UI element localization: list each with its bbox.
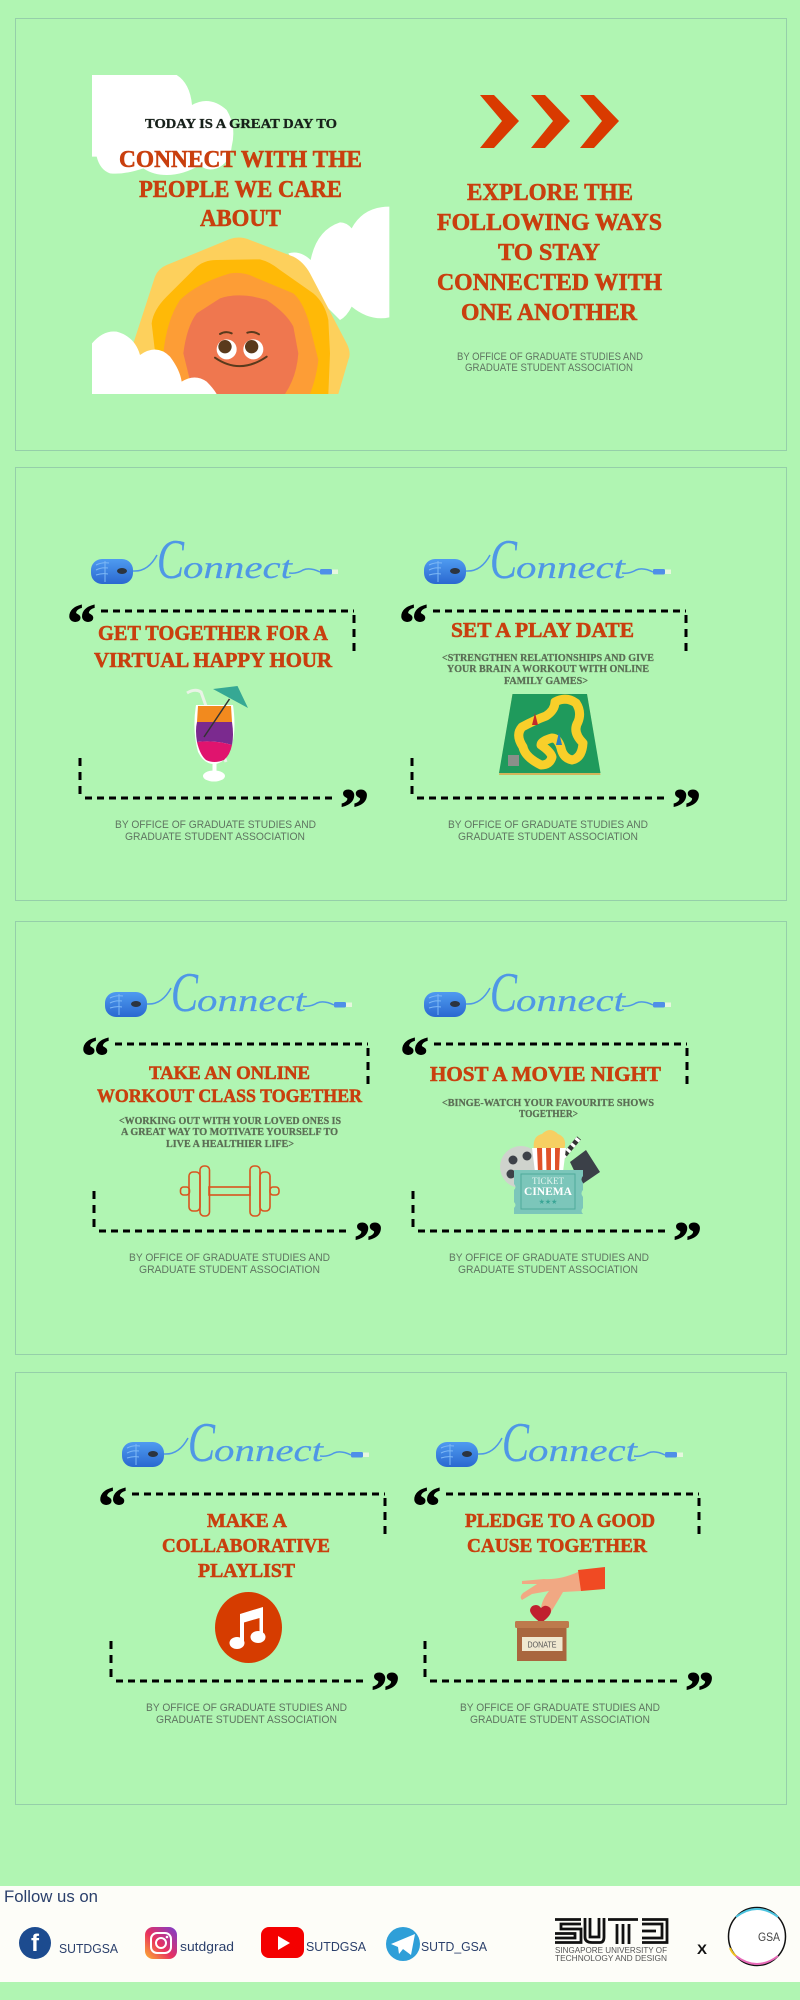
byline xyxy=(146,1702,347,1726)
byline: BY OFFICE OF GRADUATE STUDIES AND xyxy=(457,351,643,363)
social: instagram xyxy=(145,1927,234,1959)
connect mouse logo: onnect xyxy=(516,982,626,1018)
connect mouse logo: C xyxy=(188,1412,215,1474)
heading: virtual happy hour: VIRTUAL HAPPY HOUR xyxy=(94,648,333,672)
connect mouse logo xyxy=(424,529,671,591)
heading: today is a great day: ABOUT xyxy=(200,206,281,232)
icon: cocktail xyxy=(187,686,248,782)
logo: gsa xyxy=(728,1908,786,1966)
social: youtube xyxy=(261,1927,366,1958)
connect mouse logo: onnect xyxy=(197,982,307,1018)
heading: pledge to a good cause: CAUSE TOGETHER xyxy=(467,1535,647,1557)
connect mouse logo xyxy=(91,529,338,591)
icon: cinema: TICKET xyxy=(532,1176,564,1186)
heading: online workout class: WORKOUT CLASS TOGETHER xyxy=(97,1086,362,1107)
follow us heading: Follow us on xyxy=(4,1888,98,1906)
connect mouse logo: C xyxy=(157,529,184,591)
connect mouse logo: C xyxy=(502,1412,529,1474)
connect mouse logo xyxy=(424,962,671,1024)
icon: donation box xyxy=(515,1567,605,1661)
social: facebook: f xyxy=(31,1930,40,1957)
connect mouse logo: onnect xyxy=(516,549,626,585)
connect mouse logo: onnect xyxy=(214,1432,324,1468)
heading: collaborative playlist xyxy=(162,1510,330,1582)
heading: today is a great day: PEOPLE WE CARE xyxy=(139,177,342,203)
byline: BY OFFICE OF GRADUATE STUDIES AND xyxy=(129,1252,330,1264)
quote frame xyxy=(400,1026,702,1271)
icon: music note xyxy=(215,1592,282,1663)
quote frame: “ xyxy=(400,1026,429,1086)
icon: board game xyxy=(499,694,600,775)
social: telegram: SUTD_GSA xyxy=(421,1939,487,1954)
byline: GRADUATE STUDENT ASSOCIATION xyxy=(465,362,633,374)
icon: donation box: DONATE xyxy=(528,1640,556,1650)
heading: explore the following ways xyxy=(437,180,662,326)
panel: row one xyxy=(16,468,786,900)
byline: GRADUATE STUDENT ASSOCIATION xyxy=(125,831,305,843)
heading: set a play date: SET A PLAY DATE xyxy=(451,618,634,642)
heading: explore the following ways: TO STAY xyxy=(498,240,600,266)
text: play date description xyxy=(442,653,654,687)
icon: cinema: ★★★ xyxy=(539,1198,557,1206)
connect mouse logo: onnect xyxy=(183,549,293,585)
heading: collaborative playlist: MAKE A xyxy=(207,1510,287,1532)
text: play date description: FAMILY GAMES> xyxy=(504,676,588,687)
quote frame: ” xyxy=(672,778,701,838)
panel: row two xyxy=(16,922,786,1354)
panel: row three xyxy=(16,1372,786,1804)
heading: online workout class xyxy=(97,1063,362,1107)
text: workout description: <WORKING OUT WITH YOUR LOVED ONES IS xyxy=(119,1116,341,1127)
illustration: smiling sun with clouds xyxy=(92,75,389,394)
logo: singapore university of technology and design: SINGAPORE UNIVERSITY OF xyxy=(555,1945,667,1955)
quote frame: “ xyxy=(399,593,428,653)
social: facebook: SUTDGSA xyxy=(59,1941,118,1956)
logo: gsa: GSA xyxy=(758,1930,780,1944)
footer xyxy=(0,1886,800,1982)
heading: virtual happy hour: GET TOGETHER FOR A xyxy=(98,621,329,645)
quote frame xyxy=(412,1476,714,1721)
text: movie description xyxy=(442,1098,654,1120)
icon: cinema xyxy=(500,1130,600,1214)
text: play date description: YOUR BRAIN A WORKOUT WITH ONLINE xyxy=(447,664,649,675)
social: youtube: SUTDGSA xyxy=(306,1939,366,1954)
byline: GRADUATE STUDENT ASSOCIATION xyxy=(156,1714,337,1726)
social: telegram xyxy=(386,1927,487,1961)
quote frame: “ xyxy=(81,1026,110,1086)
connect mouse logo xyxy=(436,1412,683,1474)
connect mouse logo: C xyxy=(171,962,198,1024)
byline: BY OFFICE OF GRADUATE STUDIES AND xyxy=(146,1702,347,1714)
quote frame: “ xyxy=(412,1476,441,1536)
quote frame xyxy=(399,593,701,838)
icon: dumbbell xyxy=(180,1166,279,1216)
heading: today is a great day xyxy=(119,116,362,232)
quote frame: “ xyxy=(98,1476,127,1536)
text: movie description: <BINGE-WATCH YOUR FAVOURITE SHOWS xyxy=(442,1098,654,1109)
connect mouse logo: C xyxy=(490,529,517,591)
quote frame xyxy=(98,1476,400,1721)
quote frame xyxy=(81,1026,383,1271)
byline xyxy=(448,819,648,843)
byline: BY OFFICE OF GRADUATE STUDIES AND xyxy=(115,819,316,831)
heading: explore the following ways: ONE ANOTHER xyxy=(461,300,638,326)
heading: online workout class: TAKE AN ONLINE xyxy=(149,1063,310,1084)
text: workout description: LIVE A HEALTHIER LIFE> xyxy=(166,1139,294,1150)
heading: today is a great day: TODAY IS A GREAT DAY TO xyxy=(145,116,337,131)
text: workout description xyxy=(119,1116,341,1150)
heading: collaborative playlist: COLLABORATIVE xyxy=(162,1535,330,1557)
quote frame: ” xyxy=(354,1211,383,1271)
heading: pledge to a good cause: PLEDGE TO A GOOD xyxy=(465,1510,655,1532)
quote frame: “ xyxy=(67,593,96,653)
byline xyxy=(449,1252,649,1276)
panel: hero xyxy=(16,18,786,450)
heading: host a movie night: HOST A MOVIE NIGHT xyxy=(430,1062,662,1086)
byline: GRADUATE STUDENT ASSOCIATION xyxy=(458,831,638,843)
byline: GRADUATE STUDENT ASSOCIATION xyxy=(470,1714,650,1726)
heading: explore the following ways: FOLLOWING WAYS xyxy=(437,210,662,236)
quote frame: ” xyxy=(371,1661,400,1721)
byline: BY OFFICE OF GRADUATE STUDIES AND xyxy=(448,819,648,831)
connect mouse logo xyxy=(122,1412,369,1474)
byline xyxy=(457,351,643,374)
logo: singapore university of technology and design: TECHNOLOGY AND DESIGN xyxy=(555,1953,667,1963)
separator x: X xyxy=(697,1941,708,1957)
heading: pledge to a good cause xyxy=(465,1510,655,1557)
social: facebook xyxy=(19,1927,118,1959)
heading: collaborative playlist: PLAYLIST xyxy=(198,1560,295,1582)
byline xyxy=(129,1252,330,1276)
byline xyxy=(460,1702,660,1726)
text: movie description: TOGETHER> xyxy=(519,1109,578,1120)
quote frame: ” xyxy=(685,1661,714,1721)
heading: explore the following ways: EXPLORE THE xyxy=(467,180,633,206)
text: workout description: A GREAT WAY TO MOTIVATE YOURSELF TO xyxy=(121,1127,338,1138)
quote frame: ” xyxy=(340,778,369,838)
connect mouse logo: C xyxy=(490,962,517,1024)
icon: cinema: CINEMA xyxy=(524,1186,573,1198)
byline: BY OFFICE OF GRADUATE STUDIES AND xyxy=(449,1252,649,1264)
arrows: three chevrons xyxy=(480,95,619,148)
social: instagram: sutdgrad xyxy=(180,1939,234,1954)
logo: singapore university of technology and design xyxy=(555,1918,667,1963)
byline xyxy=(115,819,316,843)
heading: today is a great day: CONNECT WITH THE xyxy=(119,147,362,173)
heading: explore the following ways: CONNECTED WITH xyxy=(437,270,662,296)
heading: virtual happy hour xyxy=(94,621,333,672)
byline: GRADUATE STUDENT ASSOCIATION xyxy=(458,1264,638,1276)
byline: BY OFFICE OF GRADUATE STUDIES AND xyxy=(460,1702,660,1714)
text: play date description: <STRENGTHEN RELATIONSHIPS AND GIVE xyxy=(442,653,654,664)
connect mouse logo xyxy=(105,962,352,1024)
connect mouse logo: onnect xyxy=(528,1432,638,1468)
quote frame xyxy=(67,593,369,838)
byline: GRADUATE STUDENT ASSOCIATION xyxy=(139,1264,320,1276)
quote frame: ” xyxy=(673,1211,702,1271)
